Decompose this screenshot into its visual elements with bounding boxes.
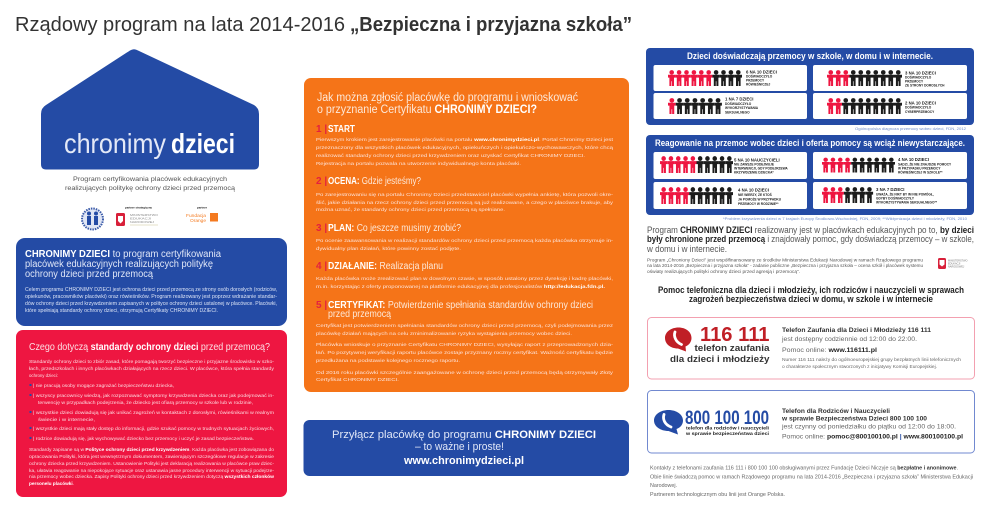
stat card: 2 na 10: 2 NA 10 DZIECI: [905, 100, 936, 106]
helpline info: o charakterze społecznym stworzonych z inicjatywy Komisji Europejskiej.: [782, 364, 937, 369]
helpline heading: [658, 285, 964, 304]
step 5: Placówka wnioskuje o przyznanie Certyfikatu CHRONIMY DZIECI, wysyłając raport z przeprowadzonych dzia-: [316, 342, 613, 348]
red panel policy text: Standardy zapisane są w Polityce ochrony dzieci przed krzywdzeniem. Każda placówka jest zobowiązana do: [29, 447, 274, 453]
heading: Dzieci doświadczają przemocy w szkole, w domu i w internecie.: [687, 51, 933, 61]
red panel intro: [29, 359, 275, 379]
logo text 116 111: 116 111: [700, 324, 770, 346]
logo subtitle: [65, 176, 235, 192]
step 4: 4 |: [316, 261, 327, 272]
helpline info: jest dostępny codziennie od 12:00 do 22:00.: [781, 336, 917, 343]
step 5: Certyfikat CHRONIMY DZIECI.: [316, 377, 399, 383]
step 5: Certyfikat jest potwierdzeniem spełniania standardów ochrony dzieci przed przemocą, czyli podejmowania przez: [316, 323, 614, 329]
red panel bullet list: | wszystkie dzieci mają stały dostęp do informacji, gdzie szukać pomocy w trudnych sytuacjach życiowych,: [33, 426, 274, 432]
stat card: 3 na 7: [813, 182, 967, 209]
stat card: 4 na 10 peer: [813, 152, 967, 179]
stat card: 3 na 10: DOŚWIADCZYŁO: [905, 74, 932, 80]
red panel intro: Standardy ochrony dzieci to zbiór zasad, które pomagają tworzyć bezpieczne i przyjazne środowisko w szko-: [29, 359, 274, 365]
blue panel heading: CHRONIMY DZIECI to program certyfikowania: [25, 249, 222, 260]
stat card: 4 na 10 family: NIE WIERZY, ŻE KTOŚ: [738, 192, 772, 197]
stat card: 4 na 10 peer: RÓWIEŚNICZEJ W SZKOLE**: [898, 170, 943, 174]
panel: call to action: – to ważne i proste!: [415, 441, 504, 453]
step 5: przedłużana na podstawie kolejnego rocznego raportu.: [316, 358, 460, 364]
red panel heading: Czego dotyczą standardy ochrony dzieci przed przemocą?: [29, 342, 270, 353]
panel: children experience violence: [646, 48, 974, 125]
stat card: 6 na 10: 6 NA 10 DZIECI: [746, 70, 777, 74]
step 1: Pierwszym krokiem jest zarejestrowanie placówki na portalu www.chronimydzieci.pl . Portal Chronimy Dzieci jest: [316, 137, 614, 143]
helpline info: Pomoc online: pomoc@800100100.pl | www.800100100.pl: [782, 434, 963, 440]
logo text 800 100 100: 800 100 100: [685, 407, 769, 429]
step 4: Każda placówka może zrealizować plan w dowolnym czasie, w sposób ustalony przez dyrekcję i kadrę placówki,: [316, 276, 613, 282]
step 5: placówkę działań mających na celu zminimalizowanie ryzyka wystąpienia przemocy wobec dzieci.: [316, 331, 572, 337]
footer note: Obie linie świadczą pomoc w ramach Rządowego programu na lata 2014-2016 „Bezpieczna i przyjazna szkoła” Ministerstwa Edukacji: [650, 474, 973, 480]
stat card: 2 na 10: DOŚWIADCZYŁO: [905, 104, 932, 110]
stat card: 4 na 10 peer: SĄDZI, ŻE NIE ZNAJDZIE POMOCY: [898, 162, 952, 166]
helpline info: jest czynny od poniedziałku do piątku od 12:00 do 18:00.: [781, 424, 956, 430]
stat card: 4 na 10 peer: W PRZYPADKU PRZEMOCY: [898, 166, 941, 170]
funding note: Program „Chroniony Dzieci” jest współfinansowany ze środków Ministerstwa Edukacji Narodowej w ramach Rządowego programu: [647, 258, 924, 262]
logo text 800 100 100: [685, 407, 769, 436]
partner logos: EDUKACJI: [130, 216, 151, 220]
panel: helpline 116 111: [648, 318, 974, 379]
stat card: 2 na 10: CYBERPRZEMOCY: [905, 110, 935, 114]
stat card: 1 na 7: DOŚWIADCZYŁO: [725, 101, 752, 106]
funding note: na lata 2014-2016 „Bezpieczna i przyjazna szkoła” - zadanie publiczne „Bezpieczna i przyjazna szkoła – ocena szkół i placówek systemu: [647, 263, 923, 268]
partner logos: partner: [197, 206, 208, 210]
red panel bullet list: świecie i w internecie,: [38, 417, 95, 423]
blue panel heading: placówek edukacyjnych realizujących politykę: [25, 259, 214, 270]
blue panel body: [25, 287, 277, 314]
red panel bullet list: terwencję w przypadkach podejrzenia, że dziecko jest ofiarą przemocy w szkole lub w rodzinie,: [38, 400, 253, 406]
footer note: Partnerem technologicznym obu linii jest Orange Polska.: [650, 492, 785, 498]
programme description: [646, 225, 974, 254]
programme description: były chronione przed przemocą i znajdowały pomoc, gdy doświadczą przemocy – w szkole,: [647, 234, 974, 244]
stat card: 4 na 10 family: 4 NA 10 DZIECI: [738, 188, 769, 192]
logo: ministry: [938, 258, 967, 269]
stat card: 6 na 10: [654, 65, 807, 91]
stat card: 5 na 10 teachers: [654, 152, 807, 179]
step 2: można uznać, że standardy ochrony dzieci przed przemocą są spełniane.: [316, 207, 505, 213]
red panel bullet list: | rodzice dowiadują się, jak wychowywać dziecko bez przemocy i uczyć je zasad bezpieczeństwa.: [33, 436, 254, 442]
logo: ministry: MINISTERSTWO: [948, 260, 967, 262]
programme description: Program CHRONIMY DZIECI realizowany jest w placówkach edukacyjnych po to, by dzieci: [647, 225, 974, 235]
logo subtitle: realizujących politykę ochrony dzieci przed przemocą: [65, 185, 235, 192]
title: „Bezpieczna i przyjazna szkoła”: [350, 14, 632, 36]
stat card: 3 na 10: 3 NA 10 DZIECI: [905, 70, 936, 76]
red panel policy text: ka, ułatwia reagowanie na niepokojące sytuacje oraz ustanawia jasne procedury interwencji w sytuacji podejrze-: [29, 468, 274, 474]
red panel policy text: nia przemocy wobec dziecka. Zapisy Polityki ochrony dzieci przed krzywdzeniem dotyczą wszystkich członków: [29, 474, 274, 480]
helpline info: [781, 408, 963, 440]
step 2: OCENA: Gdzie jesteśmy?: [328, 176, 421, 187]
step 4: DZIAŁANIE: Realizacja planu: [328, 261, 443, 272]
partner logos: NARODOWEJ: [130, 220, 155, 224]
helpline info: [781, 327, 962, 369]
stat card: 4 na 10 peer: 4 NA 10 DZIECI: [898, 157, 929, 162]
logo text 800 100 100: w sprawie bezpieczeństwa dzieci: [685, 431, 769, 436]
funding note: [647, 258, 924, 274]
stat card: 3 na 7: WYKORZYSTYWANIA SEKSUALNEGO**: [876, 200, 938, 204]
stat card: 5 na 10 teachers: INTERWENCJI, GDY PODEJRZEWA: [734, 166, 788, 170]
step 1: Rejestracja na portalu pozwala na utworzenie indywidualnego konta placówki.: [316, 161, 521, 167]
stat card: 3 na 7: UWAŻA, ŻE NIKT BY IM NIE POMÓGŁ,: [876, 192, 934, 196]
footer note: Narodowej.: [650, 483, 677, 489]
step 2: Po zarejestrowaniu się na portalu Chronimy Dzieci przedstawiciel placówki wypełnia ankietę, która pozwoli okre-: [316, 192, 613, 198]
logo: chronimy dzieci house: chronimy: [64, 128, 166, 159]
helpline info: Telefon Zaufania dla Dzieci i Młodzieży 116 111: [782, 327, 931, 334]
logo text 800 100 100: telefon dla rodziców i nauczycieli: [686, 426, 769, 430]
stat card: 5 na 10 teachers: KRZYWDZENIE DZIECKA*: [734, 170, 774, 174]
orange panel heading: [317, 92, 578, 116]
logo text 116 111: [670, 324, 770, 365]
panel: call to action: [304, 420, 629, 476]
red panel policy text: personelu placówki.: [29, 481, 74, 487]
stat card: 2 na 10: [813, 93, 967, 119]
red panel policy text: [29, 447, 274, 487]
red panel intro: ochrony dzieci:: [29, 373, 58, 379]
step 4: [316, 261, 613, 290]
logo: ministry: NARODOWEJ: [948, 266, 965, 268]
red panel policy text: opracowania Polityki, która jest wewnętrznym dokumentem, zawierającym szczegółowe regulacje w zakresie: [29, 454, 274, 460]
blue panel heading: [25, 249, 222, 280]
source note 1: Ogólnopolska diagnoza przemocy wobec dzieci, FDN, 2012: [855, 127, 966, 131]
step 2: ślić, jakie działania na rzecz ochrony dzieci przed przemocą są już realizowane, a czego w placówce brakuje, aby: [316, 200, 614, 206]
red panel bullet list: | nie pracują osoby mogące zagrażać bezpieczeństwu dziecka,: [33, 383, 174, 389]
panel: call to action: Przyłącz placówkę do programu CHRONIMY DZIECI: [332, 429, 596, 441]
step 3: [316, 223, 613, 252]
logo: chronimy dzieci house: dzieci: [171, 128, 235, 159]
stat card: 4 na 10 family: PRZEMOCY W RODZINIE**: [738, 202, 779, 206]
title: Rządowy program na lata 2014-2016: [15, 14, 345, 36]
blue panel heading: ochrony dzieci przed przemocą: [25, 269, 154, 280]
stat card: 1 na 7: WYKORZYSTYWANIA: [725, 106, 759, 110]
funding note: oświaty realizujących polityki ochrony dzieci przed agresją i przemocą”.: [647, 269, 800, 274]
red panel intro: łach, przedszkolach i innych placówkach działających na rzecz dzieci. W placówce, która spełnia standardy: [29, 366, 275, 372]
partner logos: partner strategiczny: [125, 206, 152, 210]
blue panel body: opiekunów, pracowników placówki) oraz rówieśników. Program realizowany jest poprzez wdrażanie standar-: [25, 294, 277, 300]
step 1: realizować standardy ochrony dzieci przed krzywdzeniem oraz uzyskać Certyfikat CHRONIMY DZIECI.: [316, 153, 585, 159]
step 3: PLAN: Co jeszcze musimy zrobić?: [328, 223, 461, 234]
panel: standards: [16, 330, 287, 497]
step 5: 5 |: [316, 300, 327, 311]
logo subtitle: Program certyfikowania placówek edukacyjnych: [73, 176, 227, 183]
title: [15, 14, 632, 36]
panel: what is the programme: [16, 238, 287, 326]
step 3: dywidualny plan działań, które powinny zostać podjęte.: [316, 246, 461, 252]
helpline info: Telefon dla Rodziców i Nauczycieli: [782, 408, 890, 415]
red panel bullet list: [30, 383, 274, 442]
icon: blue phone bubble: [654, 410, 683, 434]
helpline heading: zagrożeń bezpieczeństwa dzieci w domu, w szkole i w internecie: [689, 294, 933, 304]
stat card: 3 na 10: PRZEMOCY: [905, 80, 924, 84]
stat card: 1 na 7: SEKSUALNEGO: [725, 110, 750, 114]
stat card: 6 na 10: PRZEMOCY: [746, 78, 765, 82]
stat card: 3 na 10: [813, 65, 967, 91]
blue panel body: dów ochrony dzieci przed krzywdzeniem zapisanych w polityce ochrony dzieci ustalonej w placówce. Placówki,: [25, 301, 277, 307]
stat card: 6 na 10: RÓWIEŚNICZEJ: [746, 82, 770, 86]
step 5: CERTYFIKAT: Potwierdzenie spełniania standardów ochrony dzieci: [328, 300, 593, 311]
step 5: przed przemocą: [328, 309, 391, 320]
stat card: 4 na 10 family: [654, 182, 807, 209]
footer note: Kontakty z telefonami zaufania 116 111 i 800 100 100 obsługiwanymi przez Fundację Dzieci Niczyje są bezpłatne i anonimowe .: [650, 466, 958, 472]
partner logos: MINISTERSTWO: [130, 213, 159, 217]
logo: ministry: EDUKACJI: [948, 262, 961, 266]
red panel bullet list: | wszyscy pracownicy wiedzą, jak rozpoznawać symptomy krzywdzenia dziecka oraz jak podejmować in-: [33, 393, 274, 399]
stat card: 1 na 7: [654, 93, 807, 119]
red panel policy text: ochrony dziecka przed krzywdzeniem. Ustanowienie Polityki jest deklaracją realizowania w placówce praw dziec-: [29, 461, 274, 467]
stat card: 6 na 10: DOŚWIADCZYŁO: [746, 74, 773, 78]
panel: helpline 800 100 100: [648, 390, 974, 453]
stat card: 3 na 7: 3 NA 7 DZIECI: [876, 187, 904, 192]
red panel bullet list: | wszystkie dzieci dowiadują się jak unikać zagrożeń w kontaktach z dorosłymi, rówieśnikami w realnym: [33, 410, 274, 416]
stat card: 1 na 7: 1 NA 7 DZIECI: [725, 96, 754, 102]
step 5: Od 2016 roku placówki szczególnie zaangażowane w ochronę dzieci przed przemocą będą otrzymywały Złoty: [316, 370, 614, 376]
logo text 116 111: dla dzieci i młodzieży: [670, 354, 770, 365]
blue panel body: które spełniają standardy ochrony dzieci, otrzymują Certyfikaty CHRONIMY DZIECI.: [25, 308, 218, 314]
logo text 116 111: telefon zaufania: [694, 343, 770, 354]
step 2: [316, 176, 614, 213]
step 3: Po ocenie zaawansowania w realizacji standardów ochrony dzieci przed przemocą każda placówka otrzymuje in-: [316, 238, 613, 244]
programme description: w domu i w internecie.: [646, 244, 727, 254]
orange panel heading: o przyznanie Certyfikatu CHRONIMY DZIECI?: [317, 104, 537, 116]
helpline info: w sprawie Bezpieczeństwa Dzieci 800 100 100: [781, 416, 927, 422]
source note 2: *Problem krzywdzenia dzieci w 7 krajach Europy Środkowo-Wschodniej, FDN, 2009; **Wiktymizacja dzieci i młodzieży, FDN, 2010: [723, 216, 967, 221]
step 5: [316, 300, 614, 383]
step 4: m.in. korzystając z oferty proponowanej na platformie edukacyjnej dla profesjonalistów http://edukacja.fdn.pl.: [316, 284, 606, 290]
icon: red phone bubble: [665, 328, 692, 352]
step 1: START: [328, 124, 355, 135]
step 1: przeznaczony dla wszystkich placówek edukacyjnych, opiekuńczych i opiekuńczo-wychowawczych, które chcą: [316, 145, 613, 151]
stat card: 5 na 10 teachers: NIE ZAWSZE PODEJMUJE: [734, 162, 774, 166]
helpline info: Pomoc online: www.116111.pl: [782, 347, 877, 354]
logo: chronimy dzieci house: [41, 49, 259, 170]
step 1: [316, 124, 614, 167]
panel: how to apply: [304, 78, 629, 392]
stat card: 3 na 10: ZE STRONY DOROSŁYCH: [905, 84, 945, 88]
stat card: 5 na 10 teachers: 5 NA 10 NAUCZYCIELI: [734, 158, 780, 162]
blue panel body: Celem programu CHRONIMY DZIECI jest ochrona dzieci przed przemocą ze strony osób dorosłych (rodziców,: [25, 287, 277, 293]
stat card: 3 na 7: GDYBY DOŚWIADCZYŁY: [876, 196, 915, 200]
step 3: 3 |: [316, 223, 327, 234]
step 2: 2 |: [316, 176, 327, 187]
footer note: [650, 466, 973, 498]
step 5: łań. Po pozytywnej weryfikacji raportu placówce zostaje przyznany roczny certyfikat. Ważność certyfikatu będzie: [316, 350, 613, 356]
panel: reaction to violence: [646, 135, 974, 215]
step 1: 1 |: [316, 124, 327, 135]
partner logos: Fundacja: [186, 213, 206, 218]
panel: call to action: www.chronimydzieci.pl: [403, 455, 524, 467]
helpline info: Numer 116 111 należy do ogólnoeuropejskiej grupy bezpłatnych linii telefonicznych: [782, 357, 962, 362]
orange panel heading: Jak można zgłosić placówkę do programu i wnioskować: [317, 92, 578, 104]
partner logos: [82, 206, 218, 230]
stat card: 4 na 10 family: JA POMOŻE W PRZYPADKU: [738, 198, 782, 202]
partner logos: Orange: [190, 218, 206, 223]
